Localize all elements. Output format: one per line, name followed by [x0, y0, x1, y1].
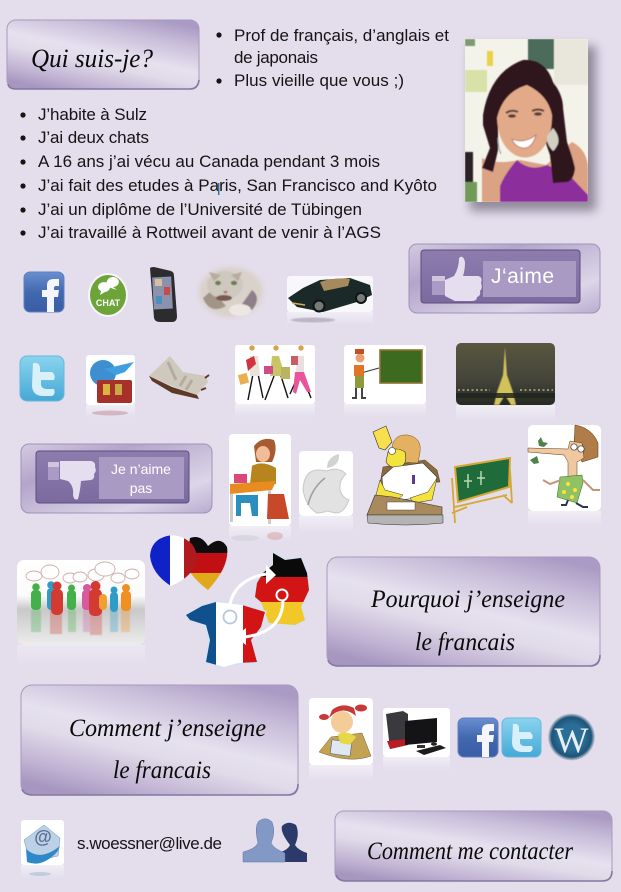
icon: chat bubble: CHAT: [96, 298, 121, 308]
photo: portrait: [465, 39, 596, 211]
label: Je n'aime pas: pas: [130, 480, 152, 496]
panel: Comment j'enseigne: [21, 685, 298, 795]
icon: facebook: [24, 272, 64, 312]
button: Je n'aime pas: [21, 444, 212, 513]
image: desktop computer: [383, 708, 450, 771]
icon: contacts silhouettes: [243, 819, 307, 862]
text block: main bullet list: A 16 ans j’ai vécu au Canada pendant 3 mois: [38, 152, 380, 171]
label: J'aime: J‘aime: [491, 265, 554, 288]
image: teacher with chalkboard: [344, 345, 426, 417]
heading: Comment j'enseigne le francais: le francais: [113, 757, 211, 784]
icon: email envelope: [21, 820, 64, 879]
image: apple logo: [299, 451, 353, 534]
heading: Comment me contacter: Comment me contacter: [367, 838, 573, 865]
text block: top bullet list: [216, 26, 449, 90]
panel: Qui suis-je: [7, 20, 199, 89]
text: email address: s.woessner@live.de: [77, 834, 222, 853]
image: black car: [287, 276, 373, 325]
image: colourful people speech bubbles: [17, 560, 145, 667]
image: Eiffel tower at night: [456, 343, 555, 421]
text block: main bullet list: J’ai travaillé à Rottweil avant de venir à l’AGS: [38, 223, 381, 242]
heading: Pourquoi j'enseigne le francais: Pourquoi j’enseigne: [370, 586, 565, 613]
text block: main bullet list: [20, 105, 437, 242]
image: open book: [149, 356, 209, 399]
button: J'aime: [409, 244, 600, 313]
heading: Comment j'enseigne le francais: Comment j’enseigne: [69, 715, 266, 742]
icon: cat: [199, 267, 263, 317]
image: shopping women: [235, 345, 315, 418]
icon: thumb down: [48, 461, 96, 500]
panel: Comment me contacter: [335, 811, 612, 881]
label: Je n'aime pas: Je n’aime: [111, 461, 171, 477]
icon: twitter: [20, 356, 64, 401]
icon: French and German hearts: [150, 536, 228, 590]
icon: France and Germany map with arrows: [184, 550, 312, 670]
icon: wordpress: W: [555, 720, 589, 760]
text block: top bullet list: Plus vieille que vous ;): [234, 71, 404, 90]
text block: top bullet list: Prof de français, d’anglais et: [234, 26, 449, 45]
icon: smartphone: [150, 267, 177, 322]
icon: email envelope: @: [34, 827, 52, 847]
icon: thumb up: [432, 257, 482, 301]
text block: main bullet list: J’habite à Sulz: [38, 105, 147, 124]
text block: top bullet list: de japonais: [234, 48, 318, 67]
image: travel suitcase: [86, 355, 135, 418]
image: child writing: [309, 698, 373, 781]
heading: Qui suis-je: Qui suis-je?: [31, 44, 153, 73]
icon: facebook small: [458, 718, 498, 757]
text block: main bullet list: J’ai fait des etudes à Paris, San Francisco and Kyôto: [38, 176, 437, 195]
image: Bart and teacher: [367, 426, 443, 525]
text block: main bullet list: J’ai deux chats: [38, 128, 149, 147]
panel: Pourquoi j'enseigne: [327, 557, 600, 666]
icon: chat bubble: [88, 273, 128, 317]
text block: main bullet list: J’ai un diplôme de l’Université de Tübingen: [38, 200, 362, 219]
heading: Pourquoi j'enseigne le francais: le francais: [415, 629, 515, 656]
icon: wordpress: [548, 714, 595, 760]
image: girl at desk: [229, 434, 291, 542]
image: green chalkboard: [452, 458, 512, 523]
image: long-nosed woman: [528, 425, 601, 527]
icon: twitter small: [502, 718, 541, 757]
